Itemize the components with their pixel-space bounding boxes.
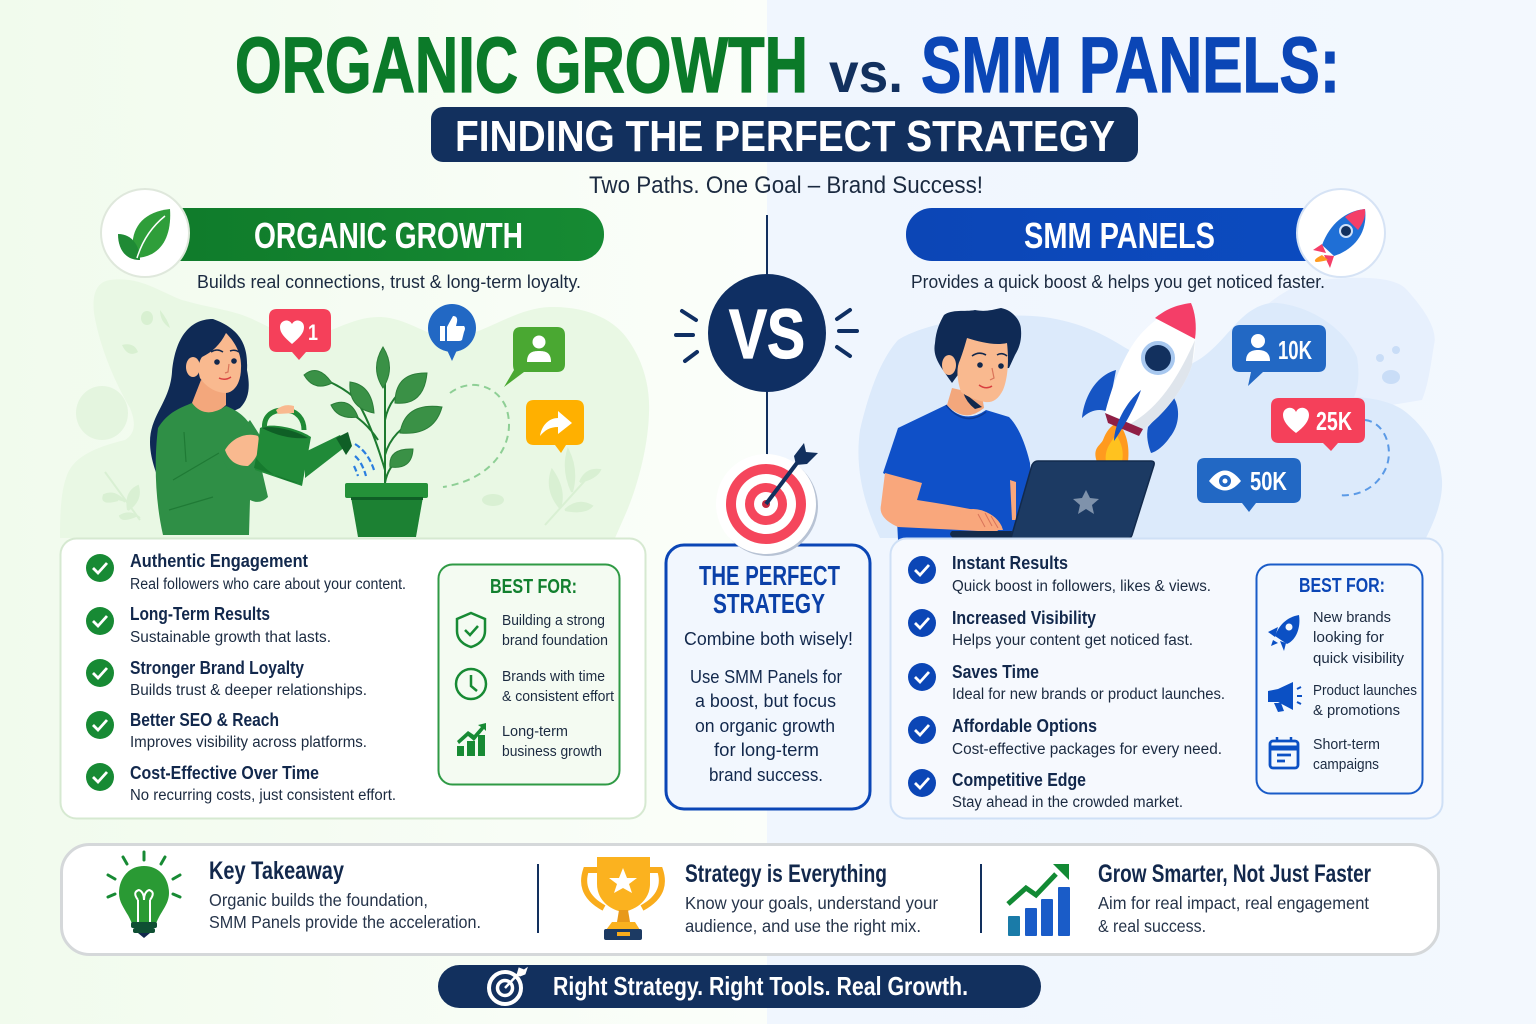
text: grow smarter: & real success. bbox=[1098, 916, 1206, 936]
text: short-term bbox=[1313, 736, 1380, 773]
bubble: 50K views bbox=[1197, 458, 1301, 512]
icon: growth bars bbox=[1008, 864, 1070, 936]
footer banner bbox=[438, 965, 1041, 1008]
item: saves time: Saves Time bbox=[952, 661, 1039, 682]
text: key takeaway: Key Takeaway bbox=[209, 857, 344, 885]
watering can bbox=[264, 410, 304, 432]
item: authentic engagement: Real followers who care about your content. bbox=[130, 576, 406, 593]
bubble: 25K likes bbox=[1271, 398, 1365, 451]
plant pot bbox=[351, 497, 423, 537]
title: SMM PANELS: bbox=[921, 20, 1340, 109]
bubble: thumbs up bbox=[428, 304, 476, 361]
text: new brands bbox=[1313, 609, 1404, 667]
dashed arc bbox=[1338, 420, 1389, 495]
sweater bbox=[156, 403, 268, 535]
footer banner: Right Strategy. Right Tools. Real Growth. bbox=[553, 971, 968, 1001]
text: long-term bbox=[502, 723, 602, 760]
item: instant results: Instant Results bbox=[952, 552, 1068, 573]
center divider line bbox=[766, 215, 768, 456]
item: cost-effective: Cost-Effective Over Time bbox=[130, 762, 319, 783]
text: strategy: audience, and use the right mix. bbox=[685, 916, 921, 936]
item: seo: Improves visibility across platforms. bbox=[130, 734, 367, 751]
arm and hand bbox=[225, 435, 260, 466]
water drops bbox=[354, 444, 374, 476]
bubble: like heart: 1 bbox=[308, 320, 318, 345]
hair bbox=[934, 308, 1021, 383]
illustration: man with rocket and laptop bbox=[881, 303, 1389, 540]
panel: smm best for: BEST FOR: bbox=[1299, 575, 1385, 597]
bubble: 25K likes: 25K bbox=[1316, 406, 1352, 436]
panel: the perfect strategy: STRATEGY bbox=[713, 588, 825, 619]
text: new brands: looking for bbox=[1313, 629, 1384, 646]
illustration: woman watering plant bbox=[150, 319, 509, 537]
item: visibility bbox=[952, 607, 1193, 649]
text: key takeaway: Organic builds the foundation, bbox=[209, 890, 428, 910]
vs badge: VS bbox=[729, 295, 805, 373]
text: brands with time: & consistent effort bbox=[502, 688, 615, 705]
item: instant results bbox=[952, 552, 1211, 595]
rocket center fin bbox=[1114, 390, 1141, 441]
text: building: brand foundation bbox=[502, 632, 608, 649]
item: saves time: Ideal for new brands or product launches. bbox=[952, 686, 1225, 703]
panel: the perfect strategy: on organic growth bbox=[695, 716, 835, 736]
neck bbox=[947, 388, 984, 415]
bubble: 10K followers bbox=[1232, 325, 1326, 386]
icon: rocket bbox=[1268, 615, 1299, 651]
title bbox=[235, 20, 1340, 109]
title: ORGANIC GROWTH bbox=[235, 20, 808, 109]
panel: takeaway strip bbox=[62, 844, 1438, 954]
item: instant results: Quick boost in followers, likes & views. bbox=[952, 578, 1211, 595]
text: short-term: Short-term bbox=[1313, 736, 1380, 753]
text: short-term: campaigns bbox=[1313, 756, 1379, 773]
text: grow smarter: Aim for real impact, real engagement bbox=[1098, 893, 1369, 913]
text: brands with time: Brands with time bbox=[502, 668, 605, 685]
item: cost-effective bbox=[130, 762, 396, 804]
heading: organic growth bbox=[130, 208, 604, 261]
check: seo bbox=[86, 711, 114, 739]
icon: trophy bbox=[584, 857, 662, 940]
item: brand loyalty bbox=[130, 657, 367, 699]
item: seo: Better SEO & Reach bbox=[130, 709, 279, 730]
item: saves time bbox=[952, 661, 1225, 703]
laptop bbox=[1011, 461, 1154, 538]
dashed arc bbox=[443, 385, 509, 487]
panel: the perfect strategy: THE PERFECT bbox=[699, 560, 840, 591]
text: product launches bbox=[1313, 682, 1417, 719]
panel: the perfect strategy: Use SMM Panels for bbox=[690, 667, 842, 687]
illustration backdrop: smm bbox=[858, 278, 1442, 538]
check: authentic engagement bbox=[86, 554, 114, 582]
item: competitive edge bbox=[952, 769, 1183, 811]
panel: the perfect strategy bbox=[666, 545, 870, 809]
text: strategy: Know your goals, understand your bbox=[685, 893, 938, 913]
bubble: like heart bbox=[269, 309, 331, 360]
text: grow smarter: Grow Smarter, Not Just Faster bbox=[1098, 860, 1371, 888]
rocket window bbox=[1143, 343, 1173, 373]
subtitle banner: FINDING THE PERFECT STRATEGY bbox=[455, 112, 1115, 161]
icon: calendar bbox=[1270, 737, 1298, 768]
panel: organic benefits bbox=[60, 538, 646, 818]
hair bbox=[150, 319, 249, 484]
text: new brands: quick visibility bbox=[1313, 650, 1404, 667]
smm description: Provides a quick boost & helps you get noticed faster. bbox=[911, 271, 1325, 292]
check: instant results bbox=[908, 556, 936, 584]
check: saves time bbox=[908, 663, 936, 691]
icon: rocket badge bbox=[1297, 189, 1385, 277]
icon: clock bbox=[456, 669, 486, 699]
hand bbox=[960, 509, 1003, 530]
item: authentic engagement: Authentic Engagement bbox=[130, 550, 308, 571]
icon: megaphone bbox=[1268, 682, 1302, 712]
text: long-term: Long-term bbox=[502, 723, 568, 740]
heading: organic growth: ORGANIC GROWTH bbox=[254, 215, 523, 256]
arm bbox=[881, 473, 1002, 532]
panel: the perfect strategy: Combine both wisely! bbox=[684, 629, 853, 649]
neck bbox=[192, 380, 226, 414]
item: visibility: Increased Visibility bbox=[952, 607, 1097, 628]
bubble: share bbox=[526, 400, 584, 453]
text: grow smarter bbox=[1098, 860, 1371, 936]
item: competitive edge: Competitive Edge bbox=[952, 769, 1086, 790]
item: long-term results: Long-Term Results bbox=[130, 603, 270, 624]
icon: growth chart bbox=[457, 723, 486, 756]
divider bbox=[537, 864, 539, 933]
panel: smm benefits bbox=[890, 538, 1442, 818]
icon: shield bbox=[457, 613, 485, 647]
text: strategy bbox=[685, 860, 938, 936]
panel: the perfect strategy: brand success. bbox=[709, 765, 823, 785]
check: affordable bbox=[908, 716, 936, 744]
icon: target with dart bbox=[716, 443, 818, 556]
bubble: follower bbox=[504, 327, 565, 387]
text: long-term: business growth bbox=[502, 743, 602, 760]
item: affordable: Affordable Options bbox=[952, 715, 1097, 736]
item: seo bbox=[130, 709, 367, 751]
check: competitive edge bbox=[908, 769, 936, 797]
shirt bbox=[883, 405, 1034, 540]
check: brand loyalty bbox=[86, 659, 114, 687]
panel: the perfect strategy: for long-term bbox=[714, 740, 819, 760]
organic description: Builds real connections, trust & long-term loyalty. bbox=[197, 271, 581, 292]
title: vs. bbox=[829, 41, 903, 104]
text: building bbox=[502, 612, 608, 649]
face bbox=[957, 338, 1008, 402]
item: brand loyalty: Builds trust & deeper relationships. bbox=[130, 682, 367, 699]
text: strategy: Strategy is Everything bbox=[685, 860, 887, 888]
panel: the perfect strategy: a boost, but focus bbox=[695, 691, 836, 711]
item: visibility: Helps your content get noticed fast. bbox=[952, 632, 1193, 649]
icon: leaf badge bbox=[101, 189, 189, 277]
text: building: Building a strong bbox=[502, 612, 605, 629]
item: affordable: Cost-effective packages for every need. bbox=[952, 741, 1222, 758]
icon: footer target bbox=[489, 968, 527, 1004]
rocket fins bbox=[1082, 370, 1116, 418]
item: authentic engagement bbox=[130, 550, 406, 593]
bubble: 50K views: 50K bbox=[1250, 466, 1287, 496]
plant leaves bbox=[304, 347, 442, 467]
face bbox=[199, 333, 241, 393]
panel: organic best for: BEST FOR: bbox=[490, 576, 577, 598]
check: long-term results bbox=[86, 607, 114, 635]
heading: smm panels: SMM PANELS bbox=[1024, 215, 1215, 256]
vs badge bbox=[676, 274, 857, 392]
bubble: 10K followers: 10K bbox=[1278, 335, 1312, 365]
rocket flame bbox=[1095, 422, 1129, 462]
item: long-term results bbox=[130, 603, 331, 646]
item: affordable bbox=[952, 715, 1222, 758]
rocket nose bbox=[1155, 303, 1196, 339]
ear bbox=[186, 357, 200, 377]
ear bbox=[942, 355, 956, 375]
check: visibility bbox=[908, 609, 936, 637]
plant stems bbox=[320, 355, 420, 484]
panel: smm best for bbox=[1256, 564, 1422, 794]
item: brand loyalty: Stronger Brand Loyalty bbox=[130, 657, 305, 678]
text: brands with time bbox=[502, 668, 615, 705]
text: key takeaway: SMM Panels provide the acceleration. bbox=[209, 912, 481, 932]
item: long-term results: Sustainable growth that lasts. bbox=[130, 629, 331, 646]
check: cost-effective bbox=[86, 763, 114, 791]
text: product launches: Product launches bbox=[1313, 682, 1417, 699]
divider bbox=[980, 864, 982, 933]
heading: smm panels bbox=[906, 208, 1360, 261]
item: competitive edge: Stay ahead in the crowded market. bbox=[952, 794, 1183, 811]
rocket body bbox=[1105, 303, 1195, 429]
panel: organic best for bbox=[438, 564, 620, 784]
tagline: Two Paths. One Goal – Brand Success! bbox=[589, 172, 983, 199]
text: key takeaway bbox=[209, 857, 481, 932]
icon: light bulb bbox=[108, 852, 180, 938]
item: cost-effective: No recurring costs, just consistent effort. bbox=[130, 787, 396, 804]
illustration backdrop: organic bbox=[60, 279, 649, 538]
text: new brands: New brands bbox=[1313, 609, 1391, 626]
text: product launches: & promotions bbox=[1313, 702, 1400, 719]
